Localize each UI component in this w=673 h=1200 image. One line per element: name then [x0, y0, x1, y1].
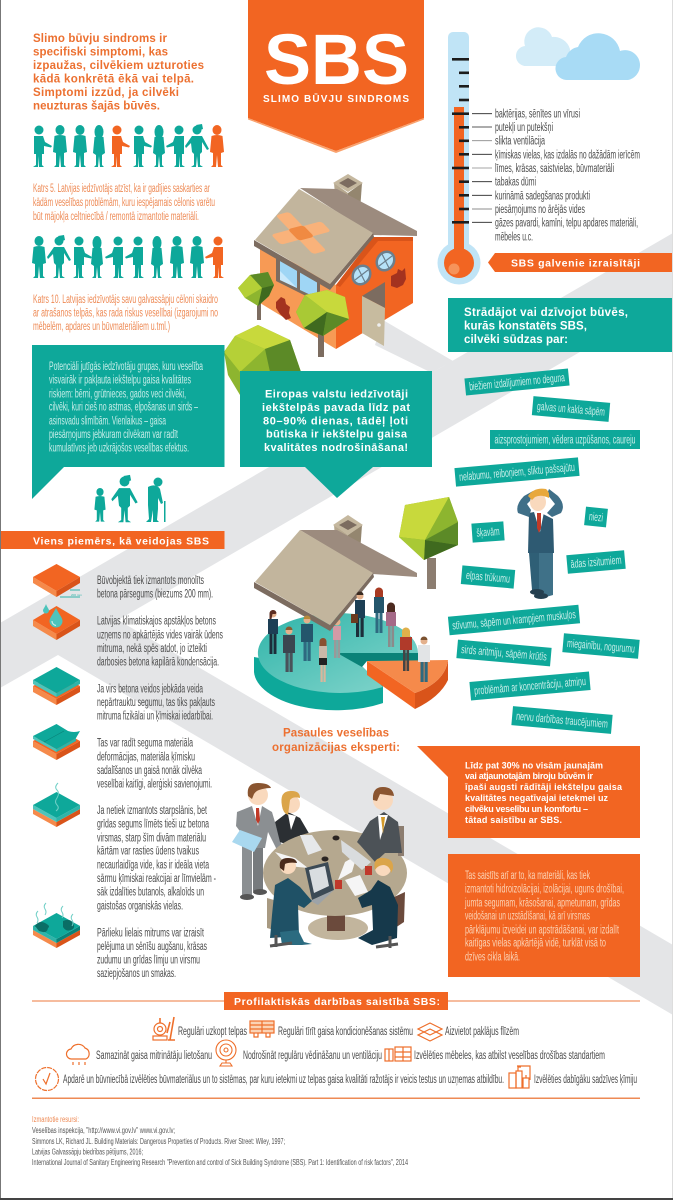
text: step 5: gaistošas organiskās vielas.: [97, 900, 183, 912]
panel: WHO finding: vai atjaunotajām biroju būvēm ir: [465, 771, 593, 781]
icon: slab with covering: [33, 667, 80, 705]
text: step 5: [97, 805, 216, 912]
icon: tiles: [418, 1023, 442, 1041]
front roof with plaster: [254, 189, 374, 290]
seated man left: [267, 858, 312, 947]
symptom tags: nelabumu, reiboņiem, sliktu pašsajūtu: [459, 462, 575, 484]
title banner: SLIMO BŪVJU SINDROMS: [263, 93, 409, 105]
round windows: [347, 247, 400, 289]
tree small: [238, 272, 274, 320]
intro text: kādā konkrētā ēkā vai telpā.: [33, 74, 194, 86]
symptom tags: stīvumu, sāpēm un krampjiem muskuļos: [452, 609, 577, 632]
text: step 6: zudumu un grīdas līmju un virsmu: [97, 954, 200, 966]
panel: complaints heading: [448, 298, 673, 352]
icon: slab with water drop: [33, 604, 80, 640]
standing woman: [275, 791, 314, 848]
panel: sensitive groups: visvairāk ir pakļauta iekštelpu gaisa kvalitātes: [49, 375, 191, 387]
symptom tags: nervu darbības traucējumiem: [516, 711, 608, 731]
panel: sensitive groups: asinsvadu slimībām. Vienlaikus – gaisa: [49, 415, 166, 427]
icon: vacuum cleaner: [153, 1017, 175, 1040]
icon: humidifier cloud: [66, 1044, 89, 1065]
text: step 4: veselībai kaitīgi, alerģiski savienojumi.: [97, 778, 212, 791]
text: step 2: [97, 616, 223, 669]
text: step 3: Ja virs betona veidos jebkāda veida: [97, 683, 203, 695]
statistic text 2: [33, 294, 218, 333]
thermometer labels: SBS causes: tabakas dūmi: [495, 177, 536, 189]
symptom tags: biežiem izdalījumiem no deguna: [469, 372, 566, 393]
panel: sensitive groups: riskiem: bērni, grūtnieces, gados veci cilvēki,: [49, 388, 186, 400]
person behind roof: [333, 618, 341, 658]
panel: WHO finding: Līdz pat 30% no visām jaunajām: [465, 760, 603, 770]
divider below prevention: [32, 1098, 640, 1099]
text: step 4: Tas var radīt seguma materiāla: [97, 737, 193, 749]
footer heading: preventive actions: Profilaktiskās darbības saistībā SBS:: [234, 996, 440, 1008]
panel: indoor time: [240, 371, 432, 498]
text: step 4: deformācijas, materiāla ķīmisku: [97, 751, 195, 763]
illustration: pie chart with people under roof: [254, 515, 448, 710]
icon: cleaning bottles: [509, 1066, 530, 1088]
standing man left: [232, 783, 282, 900]
text: step 5: sāk izdalīties butanols, alkaloīds un: [97, 887, 204, 899]
text: step 3: mitruma fizikālai un ķīmiskai iedarbībai.: [97, 711, 213, 723]
wall damage: [276, 268, 406, 320]
footer heading: preventive actions: [32, 992, 640, 1010]
thermometer labels: SBS causes: putekļi un putekšņi: [495, 122, 553, 134]
icon: vulnerable people: [94, 475, 166, 522]
text: step 5: kārtām var rasties ūdens tvaikus: [97, 846, 199, 858]
sources: [32, 1115, 408, 1167]
prevention row 2: Nodrošināt regulāru vēdināšanu un ventilāciju: [243, 1050, 382, 1062]
text: step 5: virsmas, starp šīm divām materiālu: [97, 832, 206, 844]
statistic text 2: Katrs 10. Latvijas iedzīvotājs savu galvassāpju cēloni skaidro: [33, 294, 218, 306]
text: step 2: darbosies betona kapilārā kondensācija.: [97, 657, 219, 669]
thermometer labels: SBS causes: mēbeles u.c.: [495, 232, 533, 244]
panel: indoor time: kvalitātes nodrošināšana!: [264, 442, 408, 454]
prevention row 3: [36, 1066, 637, 1090]
text: step 3: nepārtrauktu segumu, tas tiks pakļauts: [97, 697, 215, 709]
table: [263, 830, 407, 916]
panel: materials explanation: Tas saistīts arī ar to, ka materiāli, kas tiek: [465, 870, 590, 882]
text: step 1: Būvobjektā tiek izmantots monolīts: [97, 575, 204, 587]
orange pie slice: [367, 660, 448, 709]
panel: sensitive groups: Potenciāli jutīgās iedzīvotāju grupas, kuru veselība: [49, 361, 203, 373]
panel: indoor time: iekštelpās pavada līdz pat: [262, 402, 410, 414]
title banner: [248, 0, 424, 153]
panel: materials explanation: [448, 854, 640, 977]
symptom tags: problēmām ar koncentrāciju, atmiņu: [474, 676, 586, 698]
symptom tags: sirds aritmiju, sāpēm krūtīs: [461, 644, 547, 664]
people row 1: [33, 124, 224, 167]
icon: slab with mould: [33, 903, 80, 948]
standing man right: [357, 787, 404, 862]
icon: check mark seal: [36, 1068, 58, 1090]
symptom tags: [448, 369, 640, 734]
thermometer labels: SBS causes: [472, 109, 640, 244]
icon: deformed covering: [33, 724, 80, 760]
seated man right: [345, 858, 405, 948]
intro text: izpaužas, cilvēkiem uzturoties: [33, 60, 204, 72]
symptom tags: niezi: [588, 511, 604, 524]
panel: sensitive groups: [32, 345, 224, 499]
text: step 2: Latvijas klimatiskajos apstākļos betons: [97, 616, 216, 628]
intro text: Simptomi izzūd, ja cilvēki: [33, 87, 179, 99]
icon: furniture: [385, 1047, 411, 1061]
panel: indoor time: Eiropas valstu iedzīvotāji: [265, 388, 408, 400]
text: step 4: sadalīšanos un gaisā nonāk cilvēka: [97, 765, 202, 777]
prevention row 1: Aizvietot paklājus flīzēm: [445, 1026, 519, 1038]
prevention row 1: [153, 1017, 519, 1041]
panel: complaints heading: Strādājot vai dzīvojot būvēs,: [464, 307, 628, 319]
symptom tags: galvas un kakla sāpēm: [537, 401, 605, 419]
bar: example heading: [0, 531, 224, 549]
background diagonal bands: [0, 233, 673, 1015]
panel: sensitive groups: piesārņojums jebkuram cilvēkam var radīt: [49, 429, 178, 441]
people on the pie: [268, 587, 430, 682]
prevention row 1: Regulāri uzkopt telpas: [178, 1026, 247, 1038]
statistic text 1: būt mājokļa celtniecībā / remontā izmantotie materiāli.: [33, 211, 199, 223]
thermometer labels: SBS causes: baktērijas, sēnītes un vīrusi: [495, 109, 580, 121]
banner: SBS main causes: [488, 253, 673, 272]
statistic text 1: [33, 183, 215, 223]
statistic text 2: ar atrašanos telpās, kas rada riskus veselībai (izgarojumi no: [33, 308, 218, 320]
text: step 5: Ja netiek izmantots starpslānis, bet: [97, 805, 207, 817]
text: step 5: sārmu ķīmiskai reakcijai ar līmvielām -: [97, 873, 216, 885]
tree beside the man: [399, 497, 458, 589]
door: [362, 282, 385, 346]
panel: sensitive groups: cilvēki, kuri cieš no astmas, elpošanas un sirds –: [49, 402, 198, 414]
icon: concrete slab: 200 mm: [71, 593, 82, 597]
intro text: neuzturas šajās būvēs.: [33, 100, 160, 112]
panel: complaints heading: cilvēki sūdzas par:: [464, 334, 568, 346]
bar: example heading: Viens piemērs, kā veidojas SBS: [33, 536, 209, 548]
text: step 6: Pārlieku lielais mitrums var izraisīt: [97, 927, 204, 939]
panel: materials explanation: dzīves cikla laikā.: [465, 951, 520, 963]
panel: indoor time: 80–90% dienas, tādēļ ļoti: [263, 416, 408, 428]
panel: complaints heading: kurās konstatēts SBS,: [464, 320, 587, 332]
people row 2: [32, 235, 224, 278]
sources: International Journal of Sanitary Engineering Research "Prevention and control of Sick Building Syndrome (SBS). Part 1: Identification of risk factors", 2014: [32, 1158, 408, 1167]
statistic text 1: Katrs 5. Latvijas iedzīvotājs atzīst, ka ir gadījies saskarties ar: [33, 183, 210, 195]
text: step 3: [97, 683, 215, 723]
statistic text 2: mēbelēm, apdares un būvmateriāliem u.tml.): [33, 321, 170, 333]
text: step 2: uzņems no apkārtējās vides vairāk ūdens: [97, 629, 223, 641]
text: step 2: mitruma, nekā spēs atdot, jo izteikti: [97, 643, 207, 655]
panel: WHO finding: tātad saistību ar SBS.: [465, 815, 562, 825]
tree front: [296, 290, 349, 357]
icon: fan: [216, 1040, 236, 1066]
intro text: [33, 33, 204, 112]
heading: WHO experts: [272, 728, 400, 754]
text: step 5: necaurlaidīga vide, kas ir ideāla vieta: [97, 859, 209, 871]
prevention row 1: Regulāri tīrīt gaisa kondicionēšanas sistēmu: [278, 1026, 413, 1038]
sources: Izmantotie resursi:: [32, 1115, 79, 1124]
title banner: SBS: [264, 21, 409, 100]
window: [276, 258, 320, 303]
text: step 1: betona pārsegums (biezums 200 mm).: [97, 589, 213, 601]
statistic text 1: kādām veselības problēmām, kuru iespējamais cēlonis varētu: [33, 197, 215, 209]
heading: WHO experts: organizācijas eksperti:: [272, 742, 400, 754]
icon: clouds: [516, 27, 640, 80]
panel: sensitive groups: kumulatīvos jeb uzkrājošos veselības efektus.: [49, 442, 189, 454]
text: step 6: pelējuma un sēnīšu augšanu, krāsas: [97, 941, 207, 953]
icon: concrete slab: [33, 564, 82, 597]
icon: slab with vapour: [33, 783, 80, 827]
sources: Veselības inspekcija, "http://www.vi.gov.lv" www.vi.gov.lv;: [32, 1126, 175, 1135]
prevention row 2: Samazināt gaisa mitrinātāju lietošanu: [96, 1050, 212, 1062]
text: step 5: grīdas segums līmēts tieši uz betona: [97, 819, 209, 831]
symptom tags: elpas trūkumu: [465, 570, 510, 586]
table stand: [308, 905, 368, 940]
illustration: meeting around table: [232, 783, 407, 948]
panel: WHO finding: cilvēku veselību un komfortu –: [465, 804, 588, 814]
tree large: [224, 325, 302, 395]
symptom tags: šķavām: [476, 526, 500, 540]
icon: air conditioner: [250, 1021, 274, 1037]
symptom tags: ādas izsitumiem: [570, 555, 622, 571]
roof: [254, 515, 417, 631]
pie base: [254, 613, 418, 710]
text: step 1: [97, 575, 213, 601]
panel: WHO finding: īpaši augsti rādītāji iekštelpu gaisa: [464, 782, 623, 792]
panel: WHO finding: [417, 746, 640, 838]
illustration: house with plaster: [224, 174, 417, 395]
text: step 6: [97, 927, 207, 980]
banner: SBS main causes: SBS galvenie izraisītāji: [511, 258, 640, 270]
text: step 6: saziepjošanos un smakas.: [97, 968, 176, 980]
back roof: [300, 188, 417, 236]
text: step 4: [97, 737, 212, 791]
sources: Simmons LK, Richard JL. Building Materials: Dangerous Properties of Products. River Street: Wiley, 1997;: [32, 1137, 285, 1146]
laptop front: [300, 862, 334, 905]
sources: Latvijas Galvassāpju biedrības pētījums, 2016;: [32, 1148, 143, 1156]
thermometer labels: SBS causes: piesārņojums no ārējās vides: [495, 204, 585, 216]
thermometer: [438, 32, 480, 284]
heading: WHO experts: Pasaules veselības: [283, 728, 389, 740]
intro text: Slimo būvju sindroms ir: [33, 33, 168, 45]
walls: [260, 245, 336, 349]
chimney: [333, 174, 363, 214]
thermometer labels: SBS causes: kurināmā sadegšanas produkti: [495, 190, 590, 202]
intro text: specifiski simptomi, kas: [33, 46, 168, 58]
panel: indoor time: būtiska ir iekštelpu gaisa: [266, 428, 408, 440]
thermometer labels: SBS causes: slikta ventilācija: [495, 136, 545, 148]
panel: WHO finding: kvalitātes negatīvajai ietekmei uz: [465, 793, 608, 803]
man with hands on head: [517, 489, 563, 599]
prevention row 2: [66, 1040, 605, 1066]
